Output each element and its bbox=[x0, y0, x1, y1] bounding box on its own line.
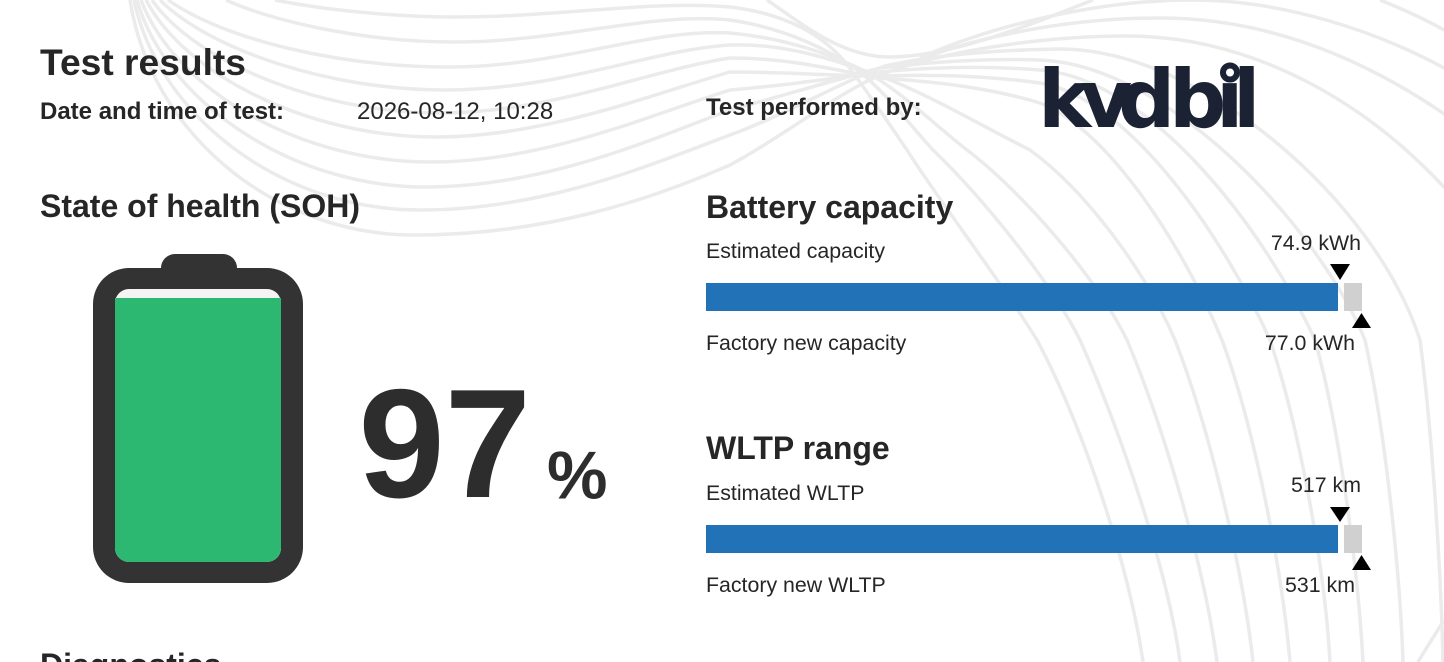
label: estimated WLTP: Estimated WLTP bbox=[706, 481, 864, 505]
test date row bbox=[40, 98, 553, 125]
value: factory new capacity: 77.0 kWh bbox=[1265, 331, 1355, 355]
value: estimated WLTP: 517 km bbox=[1291, 473, 1361, 497]
SOH value bbox=[358, 357, 607, 530]
label: estimated capacity: Estimated capacity bbox=[706, 239, 885, 263]
SOH value: % bbox=[547, 438, 607, 514]
marker: estimated bbox=[1330, 507, 1350, 522]
bar: remaining capacity bbox=[1344, 283, 1362, 311]
icon: battery bbox=[93, 254, 303, 583]
bar: remaining WLTP bbox=[1344, 525, 1362, 553]
marker: factory new bbox=[1352, 555, 1371, 570]
bar: estimated capacity bbox=[706, 283, 1338, 311]
logo: kvdbil: kvdbil bbox=[1038, 53, 1260, 146]
heading: WLTP range: WLTP range bbox=[706, 430, 890, 466]
date value: 2026-08-12, 10:28 bbox=[357, 98, 553, 125]
bar: estimated WLTP bbox=[706, 525, 1338, 553]
marker: estimated bbox=[1330, 264, 1350, 280]
panel: battery capacity bbox=[706, 189, 1371, 355]
test performed by label: Test performed by: bbox=[706, 94, 922, 121]
heading: battery capacity: Battery capacity bbox=[706, 189, 953, 225]
value: factory new WLTP: 531 km bbox=[1285, 573, 1355, 597]
value: estimated capacity: 74.9 kWh bbox=[1271, 231, 1361, 255]
title: Test results bbox=[40, 41, 246, 83]
SOH value: 97 bbox=[358, 357, 531, 530]
date label: Date and time of test: bbox=[40, 98, 284, 125]
panel: WLTP range bbox=[706, 430, 1371, 597]
heading: state of health: State of health (SOH) bbox=[40, 188, 360, 224]
label: factory new capacity: Factory new capacity bbox=[706, 331, 907, 355]
marker: factory new bbox=[1352, 313, 1371, 328]
label: factory new WLTP: Factory new WLTP bbox=[706, 573, 886, 597]
